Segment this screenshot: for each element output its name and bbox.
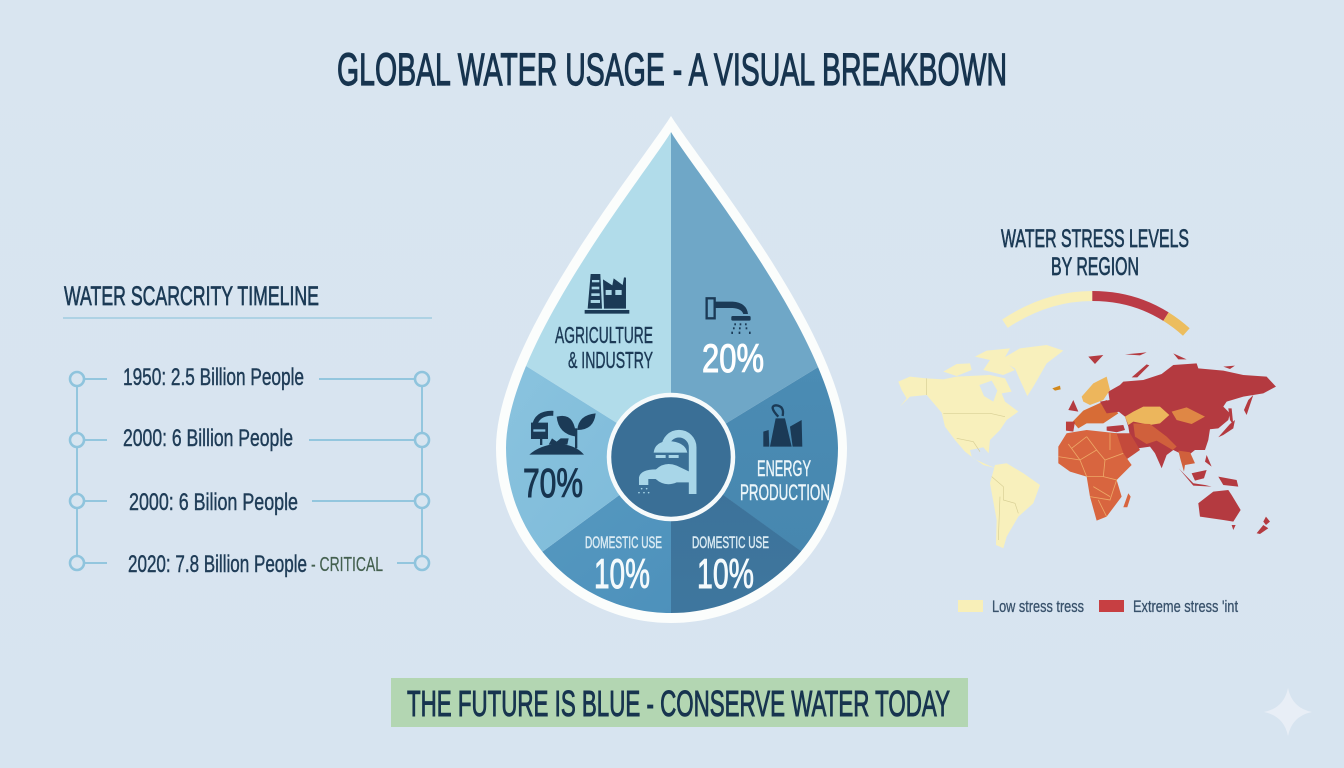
americas and greenland: [898, 345, 1063, 548]
label: agriculture and industry: [555, 322, 653, 373]
call to action banner: [391, 678, 968, 727]
stress gauge: [1005, 296, 1186, 332]
timeline heading: WATER SCARCRITY TIMELINE: [64, 281, 319, 311]
europe: [1052, 377, 1120, 432]
value: 70 percent: 70%: [523, 460, 583, 506]
icon: centre faucet: [638, 434, 693, 494]
label: energy production: [740, 456, 830, 505]
map heading: WATER STRESS LEVELS: [1001, 225, 1189, 253]
water drop chart: [496, 116, 847, 623]
call to action banner: THE FUTURE IS BLUE - CONSERVE WATER TODAY: [407, 683, 950, 724]
drop white outline: [496, 116, 847, 623]
timeline entry 1950: 1950: 2.5 Billion People: [123, 364, 304, 391]
icon: plant and landscape: [529, 413, 596, 455]
segment: domestic use left: DOMESTIC USE: [585, 534, 662, 552]
africa: [1058, 430, 1132, 521]
segment: domestic use right: 10%: [697, 550, 754, 597]
label: energy production: PRODUCTION: [740, 480, 830, 505]
timeline connectors: [77, 379, 422, 563]
segment: domestic use left: [585, 534, 662, 597]
legend: [958, 597, 1238, 616]
segment: domestic use right: DOMESTIC USE: [692, 534, 769, 552]
segment: domestic use right: [692, 534, 769, 597]
timeline entry 2020: 2020: 7.8 Billion People: [128, 551, 307, 578]
legend extreme stress: Extreme stress 'int: [1133, 597, 1238, 616]
russia and asia: [1088, 352, 1276, 534]
central asia: [1125, 407, 1169, 425]
world map: [898, 345, 1276, 548]
timeline entry 2000 repeat: 2000: 6 Bilion People: [129, 489, 298, 516]
panel: water scarcity timeline: [63, 281, 432, 578]
south asia and middle east: [1133, 423, 1195, 472]
legend low stress: [958, 597, 1084, 616]
map heading: BY REGION: [1051, 253, 1139, 281]
icon: sparkle: [1264, 688, 1312, 736]
icon: shower tap: [707, 298, 751, 334]
label: agriculture and industry: AGRICULTURE: [555, 322, 653, 348]
critical tag: - CRITICAL: [311, 554, 383, 576]
legend low stress: Low stress tress: [992, 597, 1084, 616]
map heading: [1001, 225, 1189, 281]
timeline nodes: [70, 372, 429, 570]
value: 20 percent: 20%: [702, 337, 764, 381]
drop segments: [506, 132, 838, 613]
hudson bay: [979, 381, 997, 402]
icon: power plant: [763, 405, 802, 447]
icon: factory: [585, 274, 629, 314]
segment: domestic use left: 10%: [594, 550, 650, 597]
centre circle: [609, 395, 733, 519]
label: agriculture and industry: & INDUSTRY: [568, 347, 653, 373]
label: energy production: ENERGY: [757, 456, 811, 481]
legend extreme stress: [1099, 597, 1238, 616]
panel: water stress levels: [898, 225, 1276, 616]
timeline entry 2000: 2000: 6 Billion People: [123, 425, 293, 452]
